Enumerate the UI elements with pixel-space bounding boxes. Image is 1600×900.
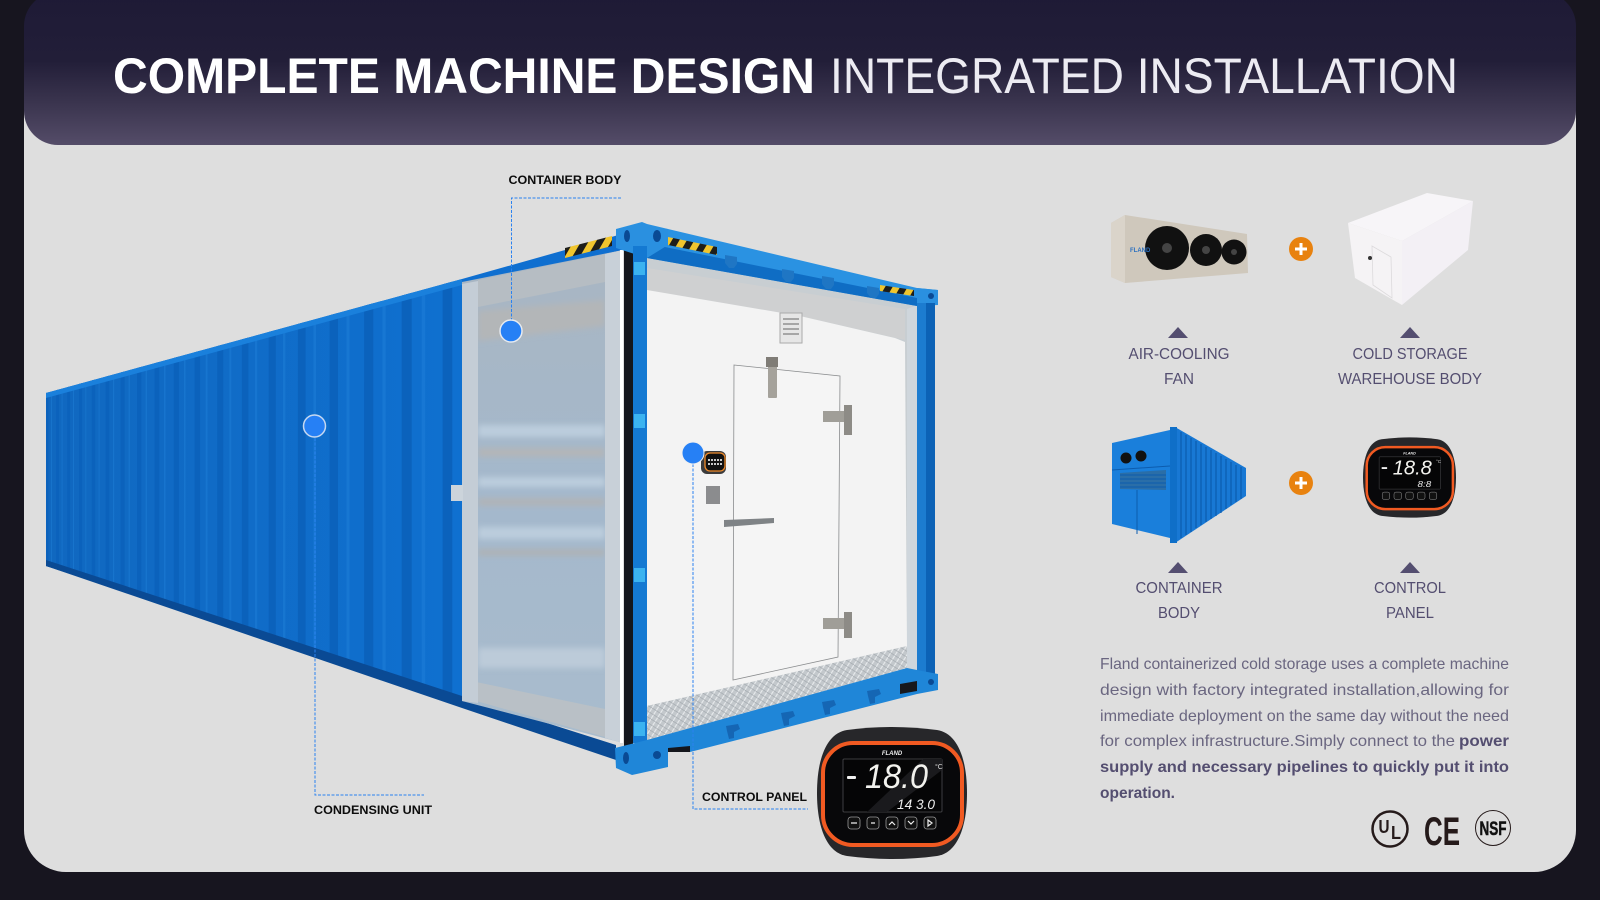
description paragraph: for complex infrastructure.Simply connect to the xyxy=(1100,733,1455,750)
vent xyxy=(780,313,802,343)
description paragraph: design with factory integrated installation,allowing for xyxy=(1100,682,1510,699)
callout: condensing unit: CONDENSING UNIT xyxy=(314,803,433,817)
caption: control panel: CONTROL xyxy=(1374,580,1446,597)
door latch xyxy=(766,357,778,398)
caption: cold storage warehouse body: WAREHOUSE BODY xyxy=(1338,371,1482,388)
top rail and hazard stripe above door xyxy=(462,226,633,285)
cold room wall xyxy=(647,257,917,745)
open container door xyxy=(451,250,623,743)
caption: cold storage warehouse body: COLD STORAGE xyxy=(1352,346,1468,363)
callout: container body: CONTAINER BODY xyxy=(508,173,622,187)
callout: container body xyxy=(500,173,622,342)
front bottom beam xyxy=(615,668,938,775)
UL mark xyxy=(1372,812,1408,846)
large control panel device: FLAND xyxy=(882,751,903,757)
main illustration: blue container with open cold room xyxy=(46,222,938,775)
large control panel device: 14 3.0 xyxy=(897,796,935,812)
description paragraph xyxy=(1100,656,1510,802)
caption: control panel: PANEL xyxy=(1386,605,1434,622)
caption: container body: BODY xyxy=(1158,605,1200,622)
lower hinge xyxy=(823,612,852,638)
callout: control panel xyxy=(682,442,808,809)
title: INTEGRATED INSTALLATION xyxy=(830,48,1458,104)
caption: control panel xyxy=(1374,562,1446,622)
top corner castings xyxy=(616,222,938,306)
icon: small container with condensing unit xyxy=(1112,427,1246,543)
caption: air-cooling fan: FAN xyxy=(1164,371,1194,388)
small wall control panel xyxy=(701,451,726,474)
icon: control panel thumbnail: FLAND xyxy=(1403,451,1416,455)
large control panel device: °C xyxy=(935,763,943,771)
UL mark: U xyxy=(1378,817,1390,837)
plus sign: top row xyxy=(1289,237,1313,261)
icon: control panel thumbnail: 8:8 xyxy=(1418,479,1431,489)
certification marks xyxy=(1372,810,1510,854)
caption: container body xyxy=(1136,562,1222,622)
large control panel device xyxy=(817,727,967,859)
front top beam xyxy=(647,227,938,306)
icon: control panel thumbnail xyxy=(1363,437,1456,518)
icon: air-cooling fan unit xyxy=(1111,215,1248,283)
right column: component grid xyxy=(1111,193,1482,622)
description paragraph: operation. xyxy=(1100,785,1175,802)
header banner xyxy=(24,0,1576,145)
left corner post xyxy=(633,246,647,743)
door handle xyxy=(724,518,774,527)
icon: control panel thumbnail: 18.8 xyxy=(1393,457,1432,479)
large control panel device: 18.0 xyxy=(865,758,928,796)
description paragraph: immediate deployment on the same day without the need xyxy=(1100,708,1509,725)
description paragraph: supply and necessary pipelines to quickly put it into xyxy=(1100,759,1509,776)
caption: air-cooling fan: AIR-COOLING xyxy=(1128,346,1230,363)
container side wall xyxy=(46,270,616,760)
caption: cold storage warehouse body xyxy=(1338,327,1482,388)
icon: air-cooling fan unit: FLAND xyxy=(1130,248,1151,254)
description paragraph: power xyxy=(1459,733,1509,750)
icon: control panel thumbnail: °C xyxy=(1436,459,1441,464)
NSF mark: NSF xyxy=(1480,819,1506,840)
callout: condensing unit xyxy=(304,415,433,817)
UL mark: L xyxy=(1391,823,1401,843)
grey junction box xyxy=(706,486,720,504)
right corner post xyxy=(917,303,935,676)
caption: container body: CONTAINER xyxy=(1136,580,1222,597)
upper hinge xyxy=(823,405,852,435)
description paragraph: Fland containerized cold storage uses a complete machine xyxy=(1100,656,1509,673)
icon: cold storage warehouse box xyxy=(1348,193,1473,305)
caption: air-cooling fan xyxy=(1128,327,1230,388)
plus sign: bottom row xyxy=(1289,471,1313,495)
checker plate floor xyxy=(647,646,907,740)
title: COMPLETE MACHINE DESIGN xyxy=(113,48,815,104)
callout: control panel: CONTROL PANEL xyxy=(702,790,807,804)
walk-in door xyxy=(733,365,840,680)
door seal xyxy=(624,246,633,746)
CE mark: CE xyxy=(1424,810,1460,854)
